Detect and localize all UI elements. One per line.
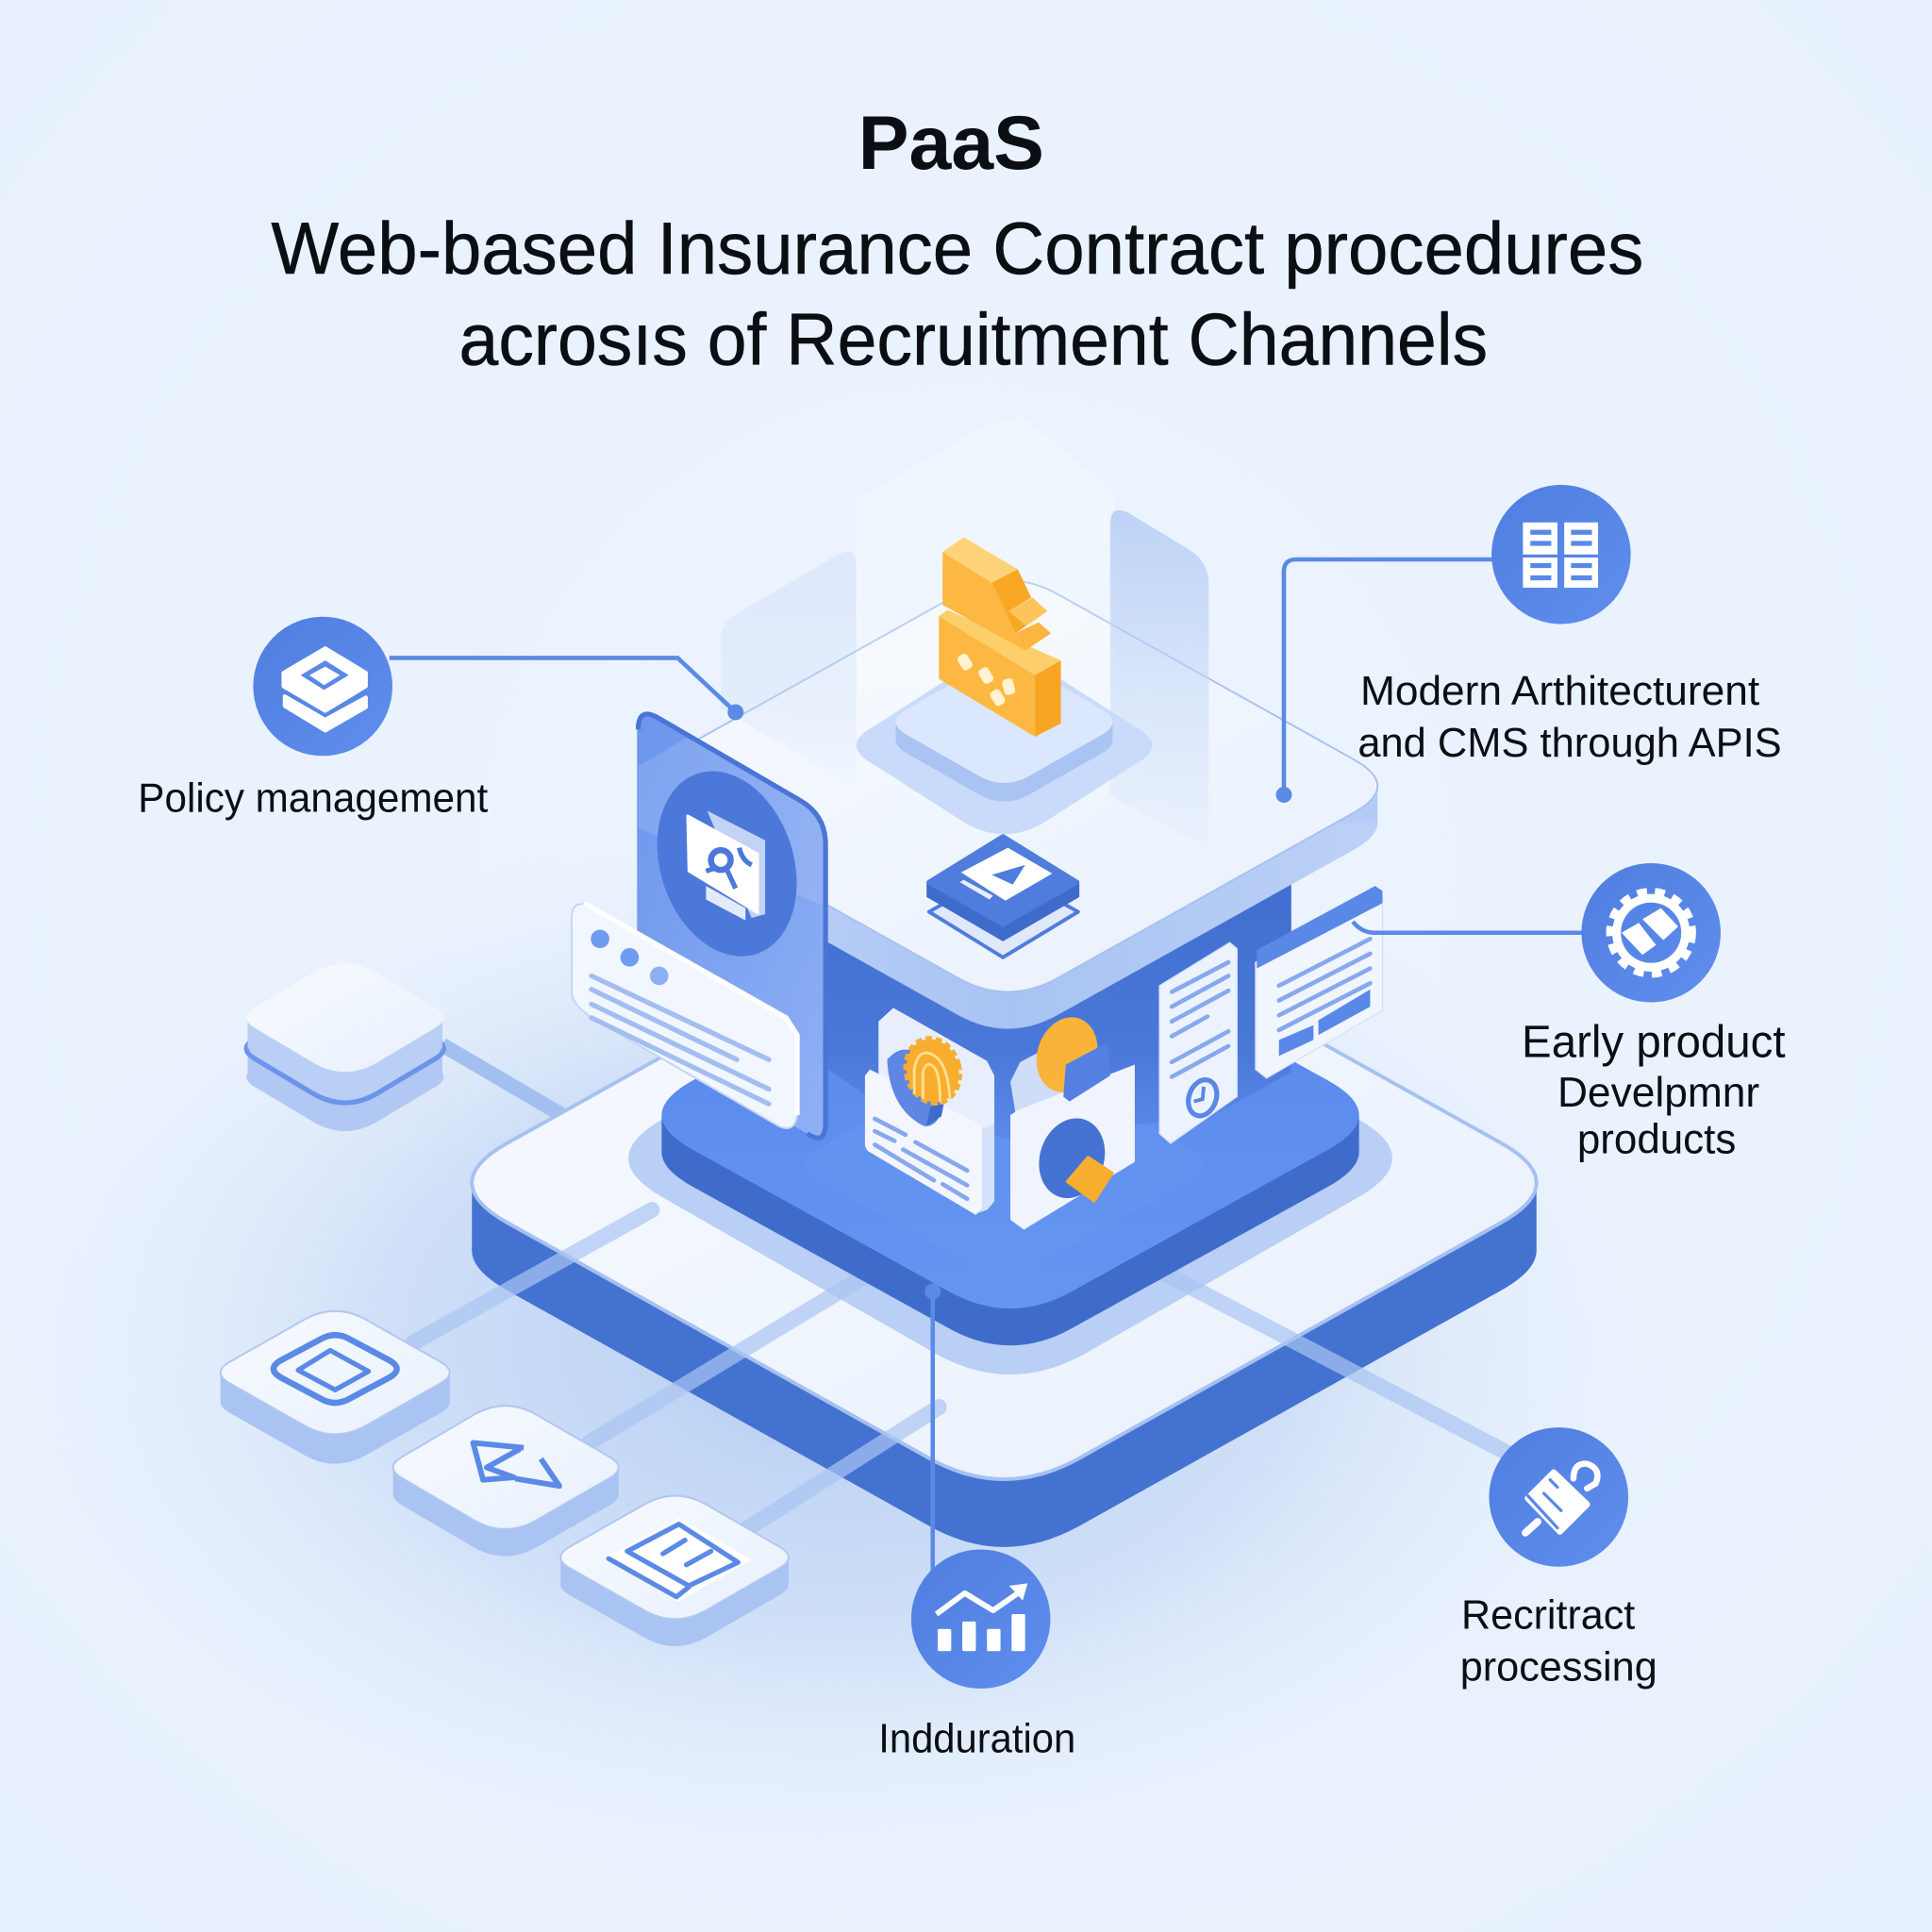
- callout: Early product: [1353, 863, 1786, 1163]
- card: shield and fingerprint: [865, 1008, 994, 1215]
- title: [271, 101, 1643, 381]
- title: PaaS: [858, 101, 1044, 186]
- title: Web-based Insurance Contract procedures: [271, 207, 1643, 290]
- callout: Modern Architecture: Modern Arthitecturent: [1360, 669, 1759, 714]
- left browser window: [572, 903, 797, 1128]
- callout: Early product: Develpmnr: [1557, 1070, 1759, 1116]
- tile: document icon: [560, 1496, 789, 1646]
- callout: Early product: products: [1577, 1117, 1736, 1163]
- tile: layers icon: [221, 1311, 450, 1464]
- upper platform: [639, 580, 1377, 1029]
- callout: Recritract processing: [1460, 1427, 1657, 1690]
- callout: Recritract processing: Recritract: [1461, 1593, 1635, 1639]
- lower platform: [472, 887, 1537, 1547]
- card: phone with clock: [1159, 942, 1237, 1143]
- glass panels: [721, 416, 1208, 850]
- yellow blocks on pedestal: [857, 537, 1152, 834]
- blue base platform: [661, 922, 1359, 1345]
- halo around blue base: [628, 942, 1392, 1374]
- central column: [813, 850, 1291, 1140]
- callout: Recritract processing: processing: [1460, 1645, 1657, 1690]
- tile: code icon: [393, 1406, 619, 1557]
- callout: Early product: Early product: [1522, 1017, 1786, 1068]
- connector links from tiles: [413, 1210, 1509, 1529]
- callout: Modern Architecture: and CMS through APIS: [1357, 721, 1782, 766]
- callout: Induration: [878, 1283, 1075, 1761]
- title: acrosıs of Recruitment Channels: [459, 298, 1488, 381]
- card: right browser window: [1256, 886, 1382, 1078]
- left blue panel with badge: [634, 714, 825, 1138]
- callout: Modern Architecture: [1275, 485, 1782, 803]
- callout: Induration: Indduration: [878, 1716, 1075, 1761]
- card: coin and wallet: [1010, 1009, 1135, 1230]
- floating block: left connector: [246, 963, 564, 1131]
- callout: Policy management: Policy management: [138, 776, 488, 822]
- callout: Policy management: [138, 617, 743, 822]
- stacked small icon on upper platform: [926, 837, 1079, 958]
